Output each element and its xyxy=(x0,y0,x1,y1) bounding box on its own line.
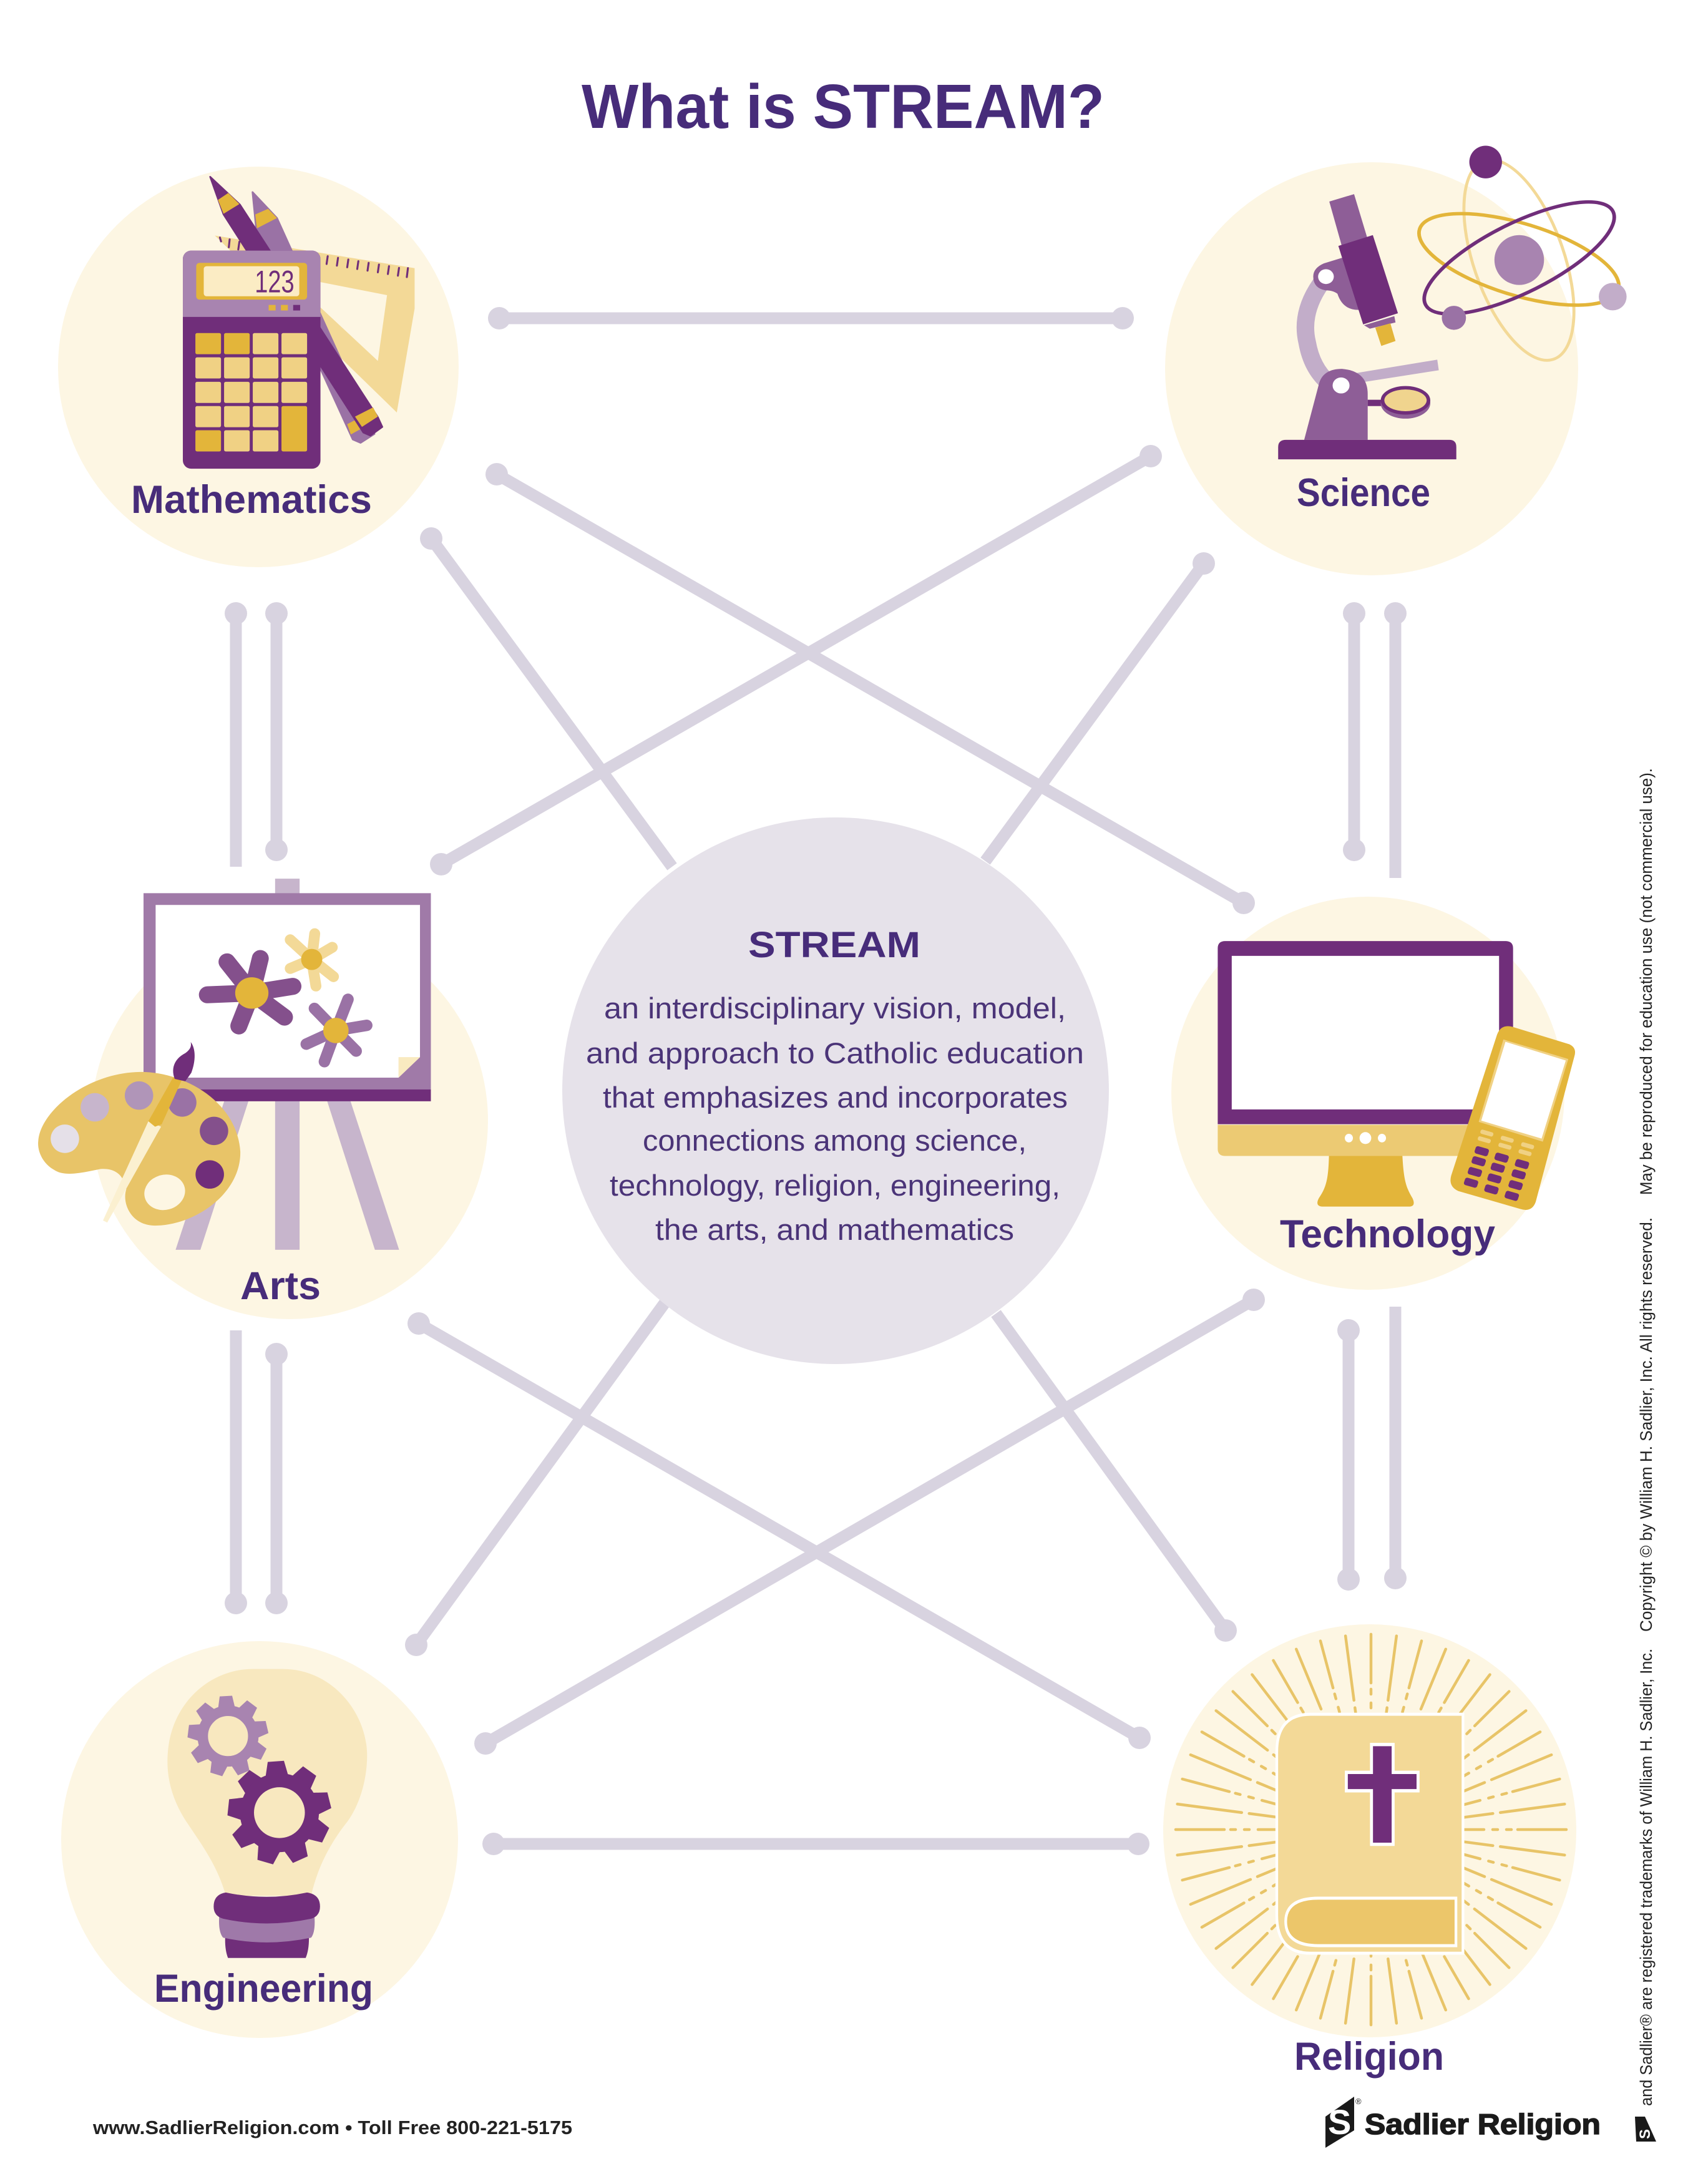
connector: engineering to religion xyxy=(482,1833,1149,1855)
connector: technology to religion, right xyxy=(1384,1307,1407,1589)
panel: technology xyxy=(1171,897,1575,1290)
text block: definition: an interdisciplinary vision, model, xyxy=(604,992,1066,1025)
panel: science xyxy=(1165,146,1630,575)
footer: website and phone: www.SadlierReligion.com • Toll Free 800-221-5175 xyxy=(92,2117,572,2138)
vertical legal text xyxy=(1637,768,1656,2106)
connector: arts to religion xyxy=(407,1312,1151,1749)
logo: Sadlier Religion: S xyxy=(1328,2102,1351,2142)
text block: definition xyxy=(586,992,1084,1246)
connector: mathematics to science xyxy=(488,307,1134,329)
label: Engineering: Engineering xyxy=(154,1967,373,2011)
vertical legal text: May be reproduced for education use (not commercial use). xyxy=(1637,768,1656,1195)
title: What is STREAM? xyxy=(582,72,1105,142)
label: Religion: Religion xyxy=(1294,2035,1444,2079)
connector: science to technology, right xyxy=(1384,602,1407,878)
text block: definition: and approach to Catholic education xyxy=(586,1036,1084,1070)
label: Mathematics: Mathematics xyxy=(131,478,372,522)
connector: center to religion xyxy=(996,1314,1237,1642)
connector: technology to religion, left xyxy=(1337,1319,1360,1591)
icon: easel and palette xyxy=(38,879,431,1250)
icon: small rotated Sadlier mark xyxy=(1635,2117,1656,2142)
logo: Sadlier Religion: ® xyxy=(1355,2097,1362,2106)
connector: technology to engineering xyxy=(474,1289,1265,1755)
vertical legal text: and Sadlier® are registered trademarks of William H. Sadlier, Inc. xyxy=(1637,1649,1656,2106)
connector: science to center xyxy=(985,552,1215,861)
connector: mathematics to center xyxy=(420,527,672,867)
icon: microscope and atom xyxy=(1278,146,1630,459)
connector: center to engineering xyxy=(405,1302,665,1656)
panel: central STREAM definition xyxy=(562,817,1109,1364)
connector: science to technology, left xyxy=(1343,602,1365,861)
label: Science: Science xyxy=(1297,471,1430,515)
label: Arts: Arts xyxy=(240,1264,321,1308)
text block: definition: technology, religion, engineering, xyxy=(610,1169,1060,1202)
label: Technology: Technology xyxy=(1280,1212,1495,1256)
connector: mathematics to technology xyxy=(485,463,1255,914)
connector: mathematics to arts, left xyxy=(225,602,247,867)
icon: book with cross xyxy=(1277,1714,1463,1953)
vertical legal text: Copyright © by William H. Sadlier, Inc. All rights reserved. xyxy=(1637,1217,1656,1632)
panel: arts xyxy=(38,879,488,1319)
text block: definition: the arts, and mathematics xyxy=(655,1213,1014,1246)
icon: calculator, pencils and set square xyxy=(183,177,414,469)
panel: religion xyxy=(1163,1624,1576,2079)
connector: mathematics to arts, right xyxy=(265,602,288,861)
connector: arts to engineering, right xyxy=(265,1343,288,1614)
logo: Sadlier Religion: Sadlier Religion xyxy=(1365,2108,1601,2140)
icon: radiating rays xyxy=(1176,1634,1566,2025)
icon: light bulb with gears xyxy=(167,1669,367,1958)
heading: STREAM: STREAM xyxy=(748,925,920,965)
connector: science to arts xyxy=(430,445,1162,875)
text block: definition: that emphasizes and incorporates xyxy=(603,1081,1068,1114)
panel: engineering xyxy=(61,1641,458,2038)
icon: calculator, pencils and set square: 123 xyxy=(255,265,295,300)
text block: definition: connections among science, xyxy=(643,1124,1027,1157)
panel: mathematics xyxy=(58,167,459,567)
icon: computer monitor and phone xyxy=(1217,941,1575,1210)
logo: Sadlier Religion xyxy=(1325,2097,1601,2148)
icon: small rotated Sadlier mark: S xyxy=(1637,2129,1654,2139)
connector: arts to engineering, left xyxy=(225,1330,247,1614)
